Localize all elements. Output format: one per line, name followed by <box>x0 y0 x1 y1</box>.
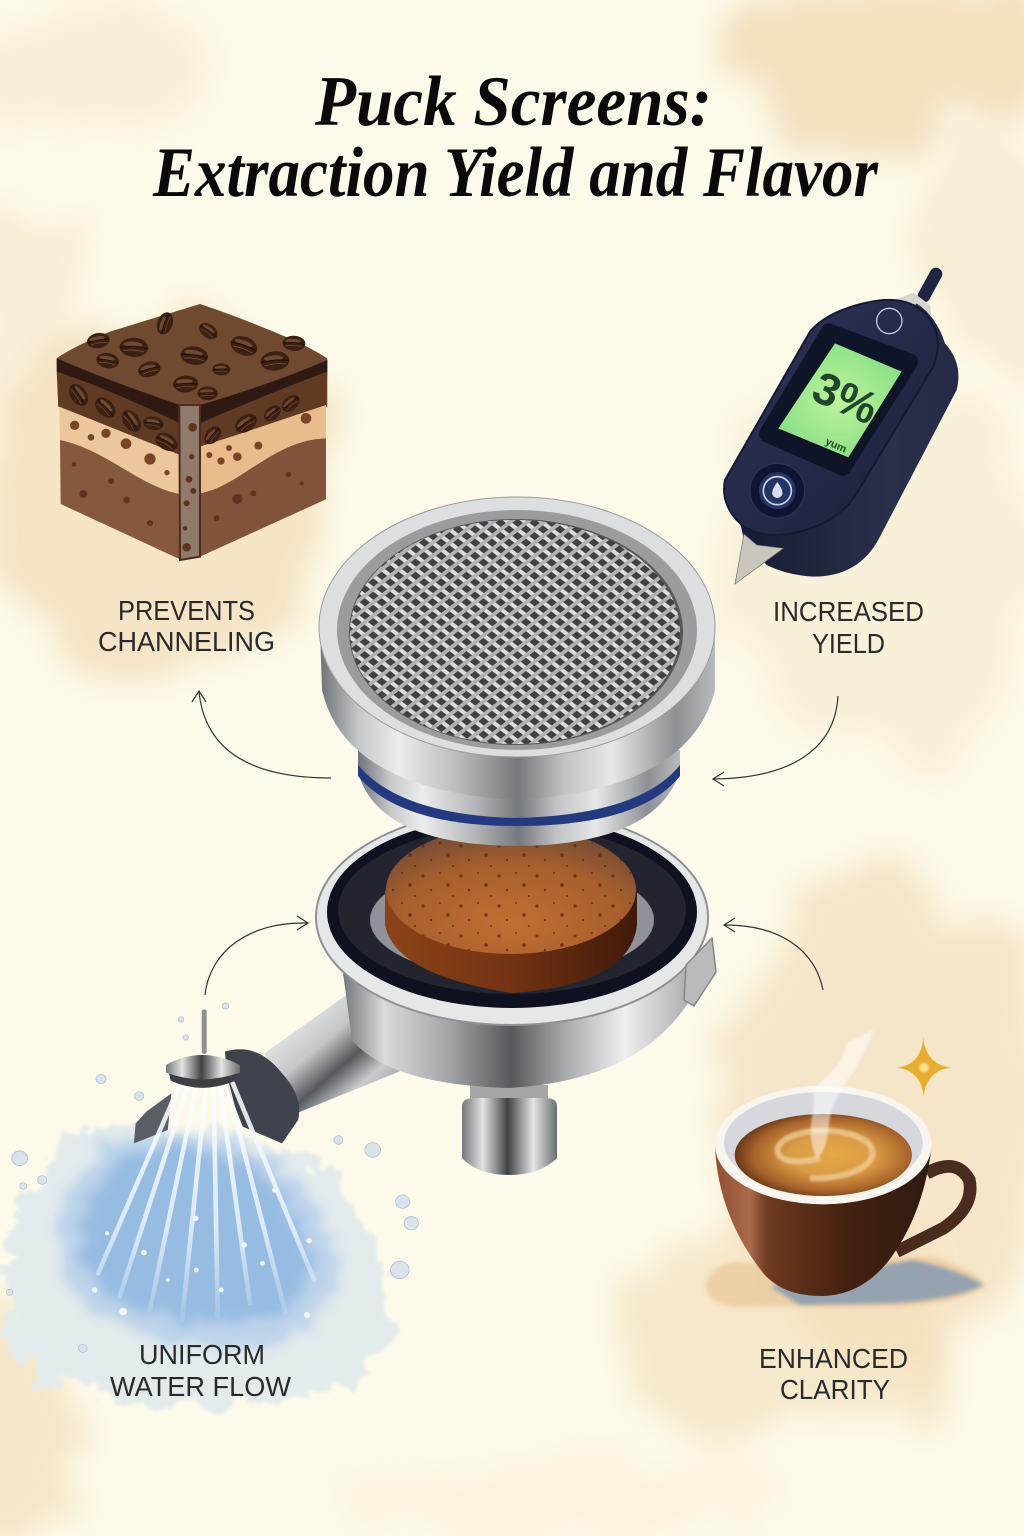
title: Extraction Yield and Flavor <box>152 134 879 212</box>
spout foot <box>462 1085 557 1175</box>
antenna <box>924 274 936 296</box>
cup rim <box>715 1086 932 1204</box>
label: increased yield <box>773 596 924 659</box>
metal tip <box>735 534 783 584</box>
lcd unit: yum <box>823 436 848 456</box>
steam <box>811 1030 873 1158</box>
handle lower bracket <box>134 1093 171 1143</box>
shadow peach <box>705 1257 985 1307</box>
droplets <box>6 1003 418 1352</box>
beans <box>65 310 306 455</box>
button <box>750 463 805 518</box>
label: increased yield: INCREASED <box>773 596 924 627</box>
label: enhanced clarity <box>759 1343 908 1405</box>
screen bezel <box>759 323 918 476</box>
device front <box>724 300 938 535</box>
label: prevents channeling: CHANNELING <box>98 626 275 657</box>
label: uniform water flow <box>110 1339 292 1402</box>
arrow: from water flow <box>205 916 308 995</box>
bean layer <box>57 372 327 455</box>
shower head <box>166 1055 240 1088</box>
title: Puck Screens: <box>314 63 712 141</box>
label: increased yield: YIELD <box>812 628 885 659</box>
label: uniform water flow: WATER FLOW <box>110 1371 292 1402</box>
coffee puck <box>385 826 637 993</box>
cube top <box>57 304 327 453</box>
speckles <box>70 413 311 475</box>
title <box>152 63 879 212</box>
dark layer <box>57 358 327 423</box>
water stain <box>7 1125 388 1408</box>
illustration: coffee cup <box>705 1030 985 1307</box>
label: prevents channeling: PREVENTS <box>118 595 255 626</box>
water jets <box>98 1083 314 1320</box>
basket rim <box>316 809 708 1025</box>
center strip <box>179 405 200 560</box>
cream layer right <box>200 405 326 493</box>
icon: sparkle <box>897 1037 952 1097</box>
cream layer left <box>59 407 180 494</box>
lcd reading: 3% <box>805 361 886 434</box>
arrow: to increased yield <box>713 696 838 786</box>
collar <box>897 293 932 317</box>
handle socket <box>225 1049 299 1143</box>
icon: yield meter device <box>724 274 958 584</box>
base layer right <box>200 438 326 557</box>
blue stain <box>81 1149 310 1322</box>
coffee <box>735 1114 912 1196</box>
shadow blue <box>770 1260 983 1305</box>
basket interior <box>327 816 697 1008</box>
icon: coffee puck cross-section cube <box>57 304 327 560</box>
spray drops <box>92 1187 312 1318</box>
mid blue stain <box>59 1134 335 1348</box>
label: uniform water flow: UNIFORM <box>139 1339 265 1370</box>
arrow: to prevents channeling <box>192 691 331 778</box>
crema swirl <box>778 1131 873 1178</box>
handle tube <box>134 990 407 1143</box>
portafilter clip <box>684 938 716 1006</box>
illustration: portafilter with puck <box>134 497 716 1175</box>
arrow: to enhanced clarity <box>724 918 823 990</box>
shower pin <box>197 1012 211 1052</box>
lcd screen <box>778 343 902 457</box>
label: enhanced clarity: ENHANCED <box>759 1343 908 1374</box>
illustration: shower head and water spray <box>6 1003 418 1352</box>
label: enhanced clarity: CLARITY <box>780 1374 890 1405</box>
device back body <box>733 303 958 577</box>
basket bowl <box>342 965 695 1088</box>
cup body <box>715 1147 932 1296</box>
pale stain <box>7 1125 388 1408</box>
puck screen <box>319 497 715 846</box>
handle <box>897 1166 970 1252</box>
label: prevents channeling <box>98 595 275 657</box>
logo <box>877 308 902 334</box>
base layer left <box>60 440 180 559</box>
